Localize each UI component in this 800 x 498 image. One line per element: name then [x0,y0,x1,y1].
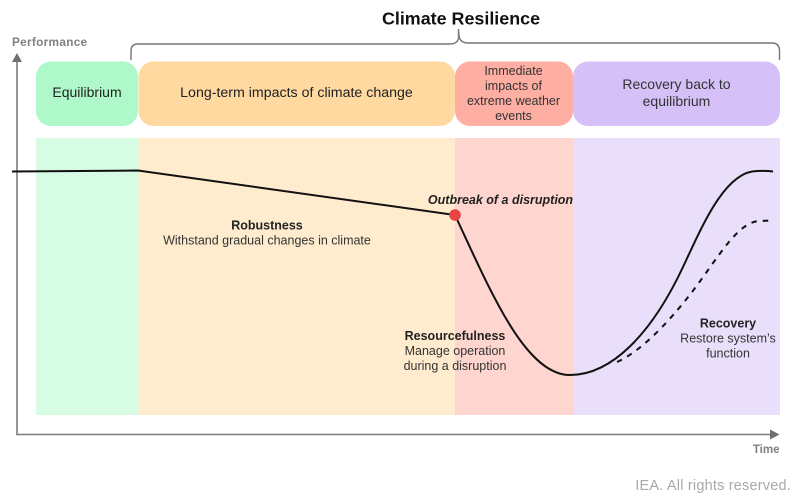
credit: IEA. All rights reserved. [635,478,791,494]
label: recovery: function [706,346,750,360]
phase header: recovery: Recovery back to [622,76,731,92]
label: outbreak of a disruption: Outbreak of a disruption [428,193,573,207]
phase header: immediate impacts: impacts of [485,79,543,93]
label: robustness: Robustness [231,218,303,232]
phase header: immediate impacts: extreme weather [467,94,560,108]
title: Climate Resilience [382,8,540,28]
label: resourcefulness: Manage operation [405,344,505,358]
phase header: immediate impacts: events [495,109,532,123]
label: resourcefulness: Resourcefulness [405,329,505,343]
x axis [16,430,779,440]
band: long-term impacts [138,138,455,415]
phase header: equilibrium: Equilibrium [52,84,122,100]
band: immediate impacts [455,138,573,415]
phase header: long-term impacts [138,62,455,126]
label: robustness: Withstand gradual changes in climate [163,234,371,248]
label: recovery: Recovery [700,316,756,330]
phase header: recovery: equilibrium [643,93,710,109]
x axis label: Time [753,444,780,456]
dashed curve: partial recovery [617,220,771,362]
phase header: equilibrium [36,62,138,126]
phase header: recovery [573,62,780,126]
band: recovery [573,138,780,415]
performance curve [12,170,773,375]
y axis label: Performance [12,35,88,49]
bracket: climate resilience span [131,29,780,60]
phase header: immediate impacts: Immediate [484,64,543,78]
disruption marker [449,209,461,221]
phase header: long-term impacts: Long-term impacts of climate change [180,85,413,101]
label: resourcefulness: during a disruption [404,359,506,373]
y axis [12,53,22,434]
band: equilibrium [36,138,138,415]
phase header: immediate impacts [455,62,573,126]
label: recovery: Restore system’s [680,332,776,346]
